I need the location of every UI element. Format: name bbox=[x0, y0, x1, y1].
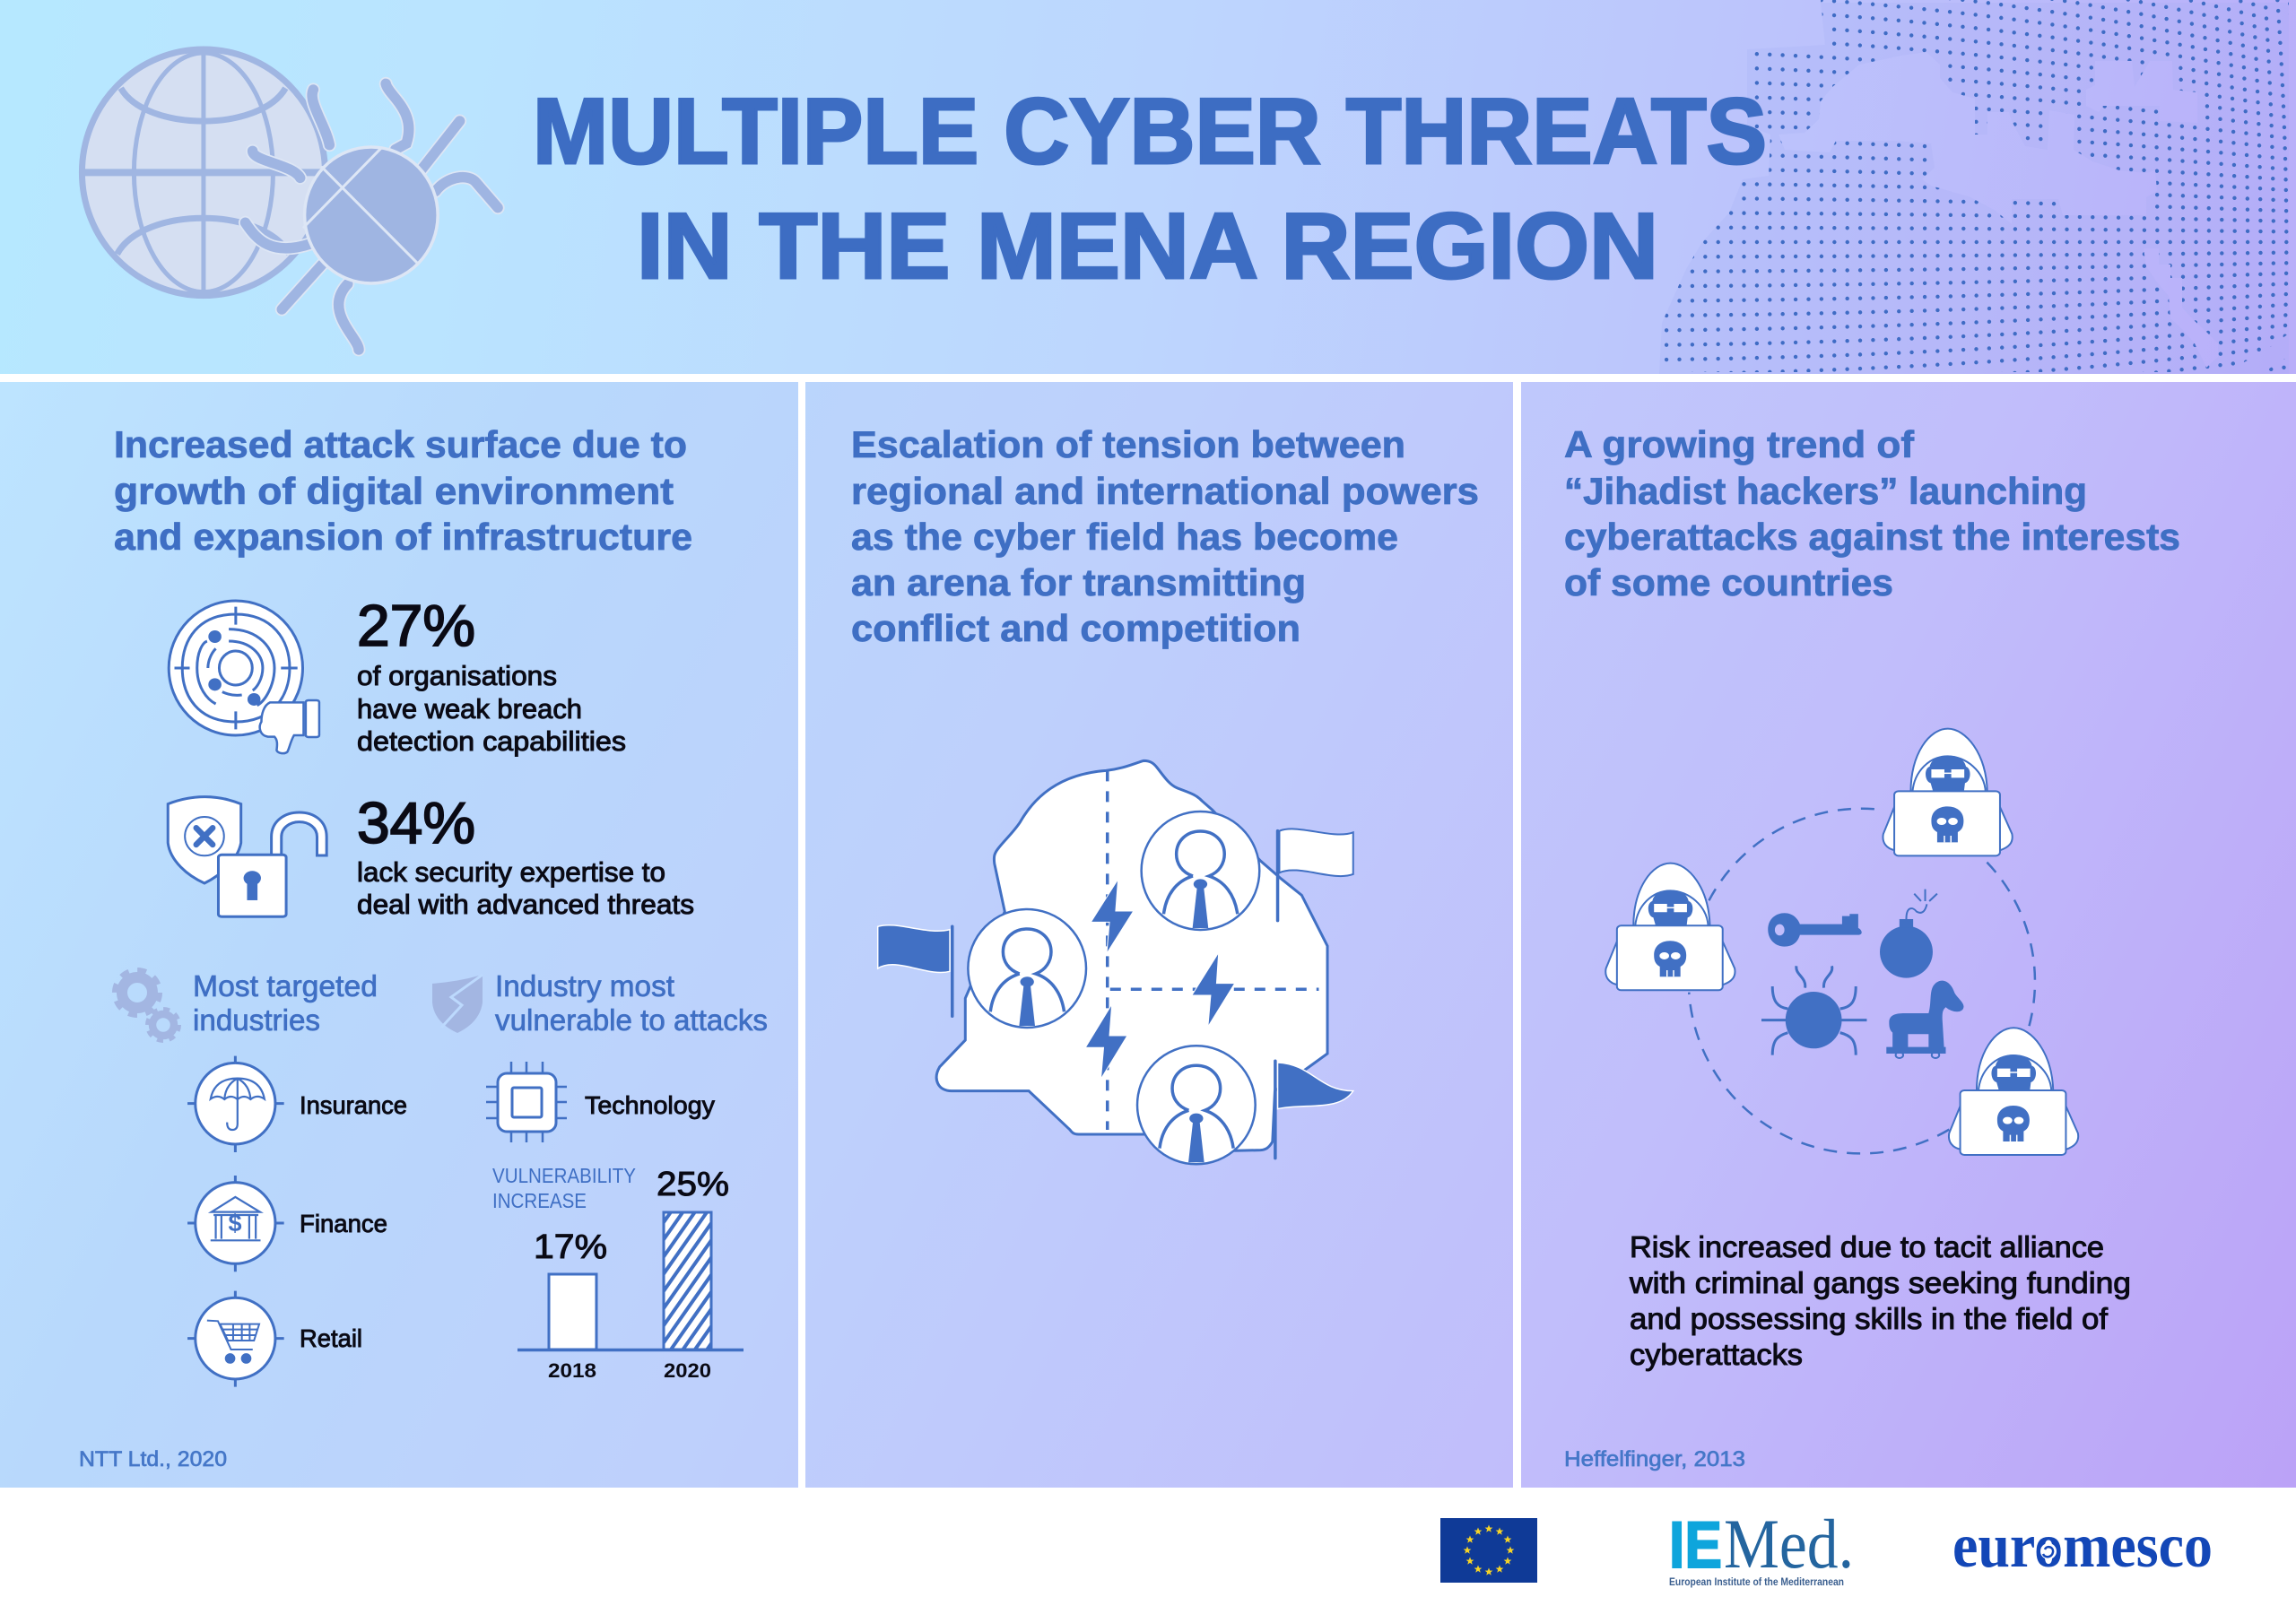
logo: IEMed bbox=[1669, 1505, 1854, 1588]
leader: west bbox=[968, 909, 1086, 1028]
leader: north east bbox=[1142, 812, 1259, 930]
bar chart: vulnerability increase: 2018 bbox=[548, 1359, 596, 1382]
text: alliance risk: cyberattacks bbox=[1630, 1338, 1803, 1371]
icon: globe bbox=[82, 49, 326, 296]
subheading: most targeted industries bbox=[193, 969, 378, 1037]
icon: bug bbox=[1761, 966, 1866, 1055]
heading: right column: “Jihadist hackers” launching bbox=[1564, 470, 2087, 512]
icon: bug bbox=[245, 83, 498, 350]
label: technology: Technology bbox=[585, 1091, 715, 1119]
heading: centre column bbox=[851, 423, 1479, 649]
source: NTT: NTT Ltd., 2020 bbox=[79, 1447, 227, 1471]
bar chart: vulnerability increase: VULNERABILITY bbox=[492, 1164, 636, 1187]
stat: 27 percent: of organisations bbox=[357, 660, 557, 691]
stat: 34 percent: lack security expertise to bbox=[357, 856, 665, 888]
icon: target with thumbs down bbox=[169, 601, 319, 753]
bar chart: vulnerability increase: 25% bbox=[657, 1166, 729, 1203]
flag: west bbox=[878, 925, 952, 1016]
logo: euromesco: euromesco bbox=[1952, 1512, 2213, 1581]
heading: centre column: regional and international powers bbox=[851, 470, 1479, 512]
heading: left column: growth of digital environment bbox=[114, 470, 674, 512]
hacker: bottom bbox=[1949, 1028, 2078, 1155]
logo: IEMed: IE bbox=[1669, 1509, 1722, 1582]
heading: right column: of some countries bbox=[1564, 561, 1893, 603]
stat: 27 percent: 27% bbox=[357, 593, 475, 658]
panel: left column background bbox=[0, 382, 798, 1488]
icon: bomb bbox=[1880, 890, 1937, 978]
heading: left column bbox=[114, 423, 692, 558]
subheading: most targeted industries: Most targeted bbox=[193, 969, 378, 1002]
subheading: industry most vulnerable bbox=[495, 969, 768, 1037]
stat: 34 percent bbox=[357, 790, 694, 920]
label: finance: Finance bbox=[300, 1210, 387, 1237]
logo: IEMed: Med. bbox=[1724, 1505, 1854, 1583]
heading: centre column: an arena for transmitting bbox=[851, 561, 1306, 603]
icon: gears bbox=[115, 970, 179, 1040]
hacker: top bbox=[1883, 729, 2013, 855]
illustration: hackers and cyber threats bbox=[1605, 729, 2078, 1155]
panel: header background bbox=[0, 0, 2296, 374]
stat: 27 percent bbox=[357, 593, 626, 757]
illustration: map with leaders and flags bbox=[878, 760, 1353, 1164]
text: alliance risk: with criminal gangs seeking funding bbox=[1629, 1266, 2131, 1299]
stat: 27 percent: have weak breach bbox=[357, 693, 582, 725]
icon: insurance umbrella bbox=[187, 1056, 284, 1152]
bar chart: vulnerability increase bbox=[492, 1164, 744, 1382]
lightning bolts bbox=[1085, 880, 1235, 1079]
heading: right column: A growing trend of bbox=[1564, 423, 1915, 465]
stat: 34 percent: 34% bbox=[357, 790, 475, 855]
heading: centre column: as the cyber field has become bbox=[851, 516, 1398, 558]
label: insurance: Insurance bbox=[300, 1091, 407, 1119]
heading: centre column: Escalation of tension between bbox=[851, 423, 1405, 465]
icon: cracked shield bbox=[432, 975, 483, 1033]
leader: south east bbox=[1137, 1046, 1256, 1164]
text: alliance risk bbox=[1629, 1230, 2131, 1371]
icon: retail cart bbox=[187, 1291, 284, 1387]
source: Heffelfinger: Heffelfinger, 2013 bbox=[1564, 1447, 1745, 1471]
dashed circle bbox=[1689, 809, 2035, 1153]
bar chart: vulnerability increase: INCREASE bbox=[492, 1189, 587, 1212]
title: MULTIPLE CYBER THREATS bbox=[533, 80, 1767, 184]
map outline bbox=[936, 760, 1327, 1150]
logo: EU flag bbox=[1440, 1518, 1537, 1583]
title: IN THE MENA REGION bbox=[637, 195, 1658, 299]
heading: right column: cyberattacks against the interests bbox=[1564, 516, 2180, 558]
heading: left column: Increased attack surface due to bbox=[114, 423, 687, 465]
subheading: most targeted industries: industries bbox=[193, 1003, 320, 1037]
subheading: industry most vulnerable: vulnerable to attacks bbox=[495, 1003, 768, 1037]
icon: shield and open padlock bbox=[168, 797, 326, 916]
title bbox=[533, 80, 1767, 299]
hacker: left bbox=[1605, 864, 1735, 990]
stat: 27 percent: detection capabilities bbox=[357, 725, 626, 757]
stat: 34 percent: deal with advanced threats bbox=[357, 889, 694, 920]
logo: IEMed: European Institute of the Mediterranean bbox=[1669, 1575, 1844, 1588]
bar chart: vulnerability increase: 17% bbox=[534, 1228, 607, 1266]
icon: finance bank bbox=[187, 1176, 284, 1271]
icon: key bbox=[1768, 913, 1862, 947]
panel: centre column background bbox=[805, 382, 1513, 1488]
flag: north east bbox=[1278, 829, 1353, 921]
flag: south east bbox=[1275, 1061, 1353, 1159]
icon: trojan horse bbox=[1886, 981, 1963, 1058]
icon: finance bank: $ bbox=[228, 1210, 242, 1237]
heading: left column: and expansion of infrastructure bbox=[114, 516, 692, 558]
text: alliance risk: and possessing skills in the field of bbox=[1630, 1302, 2109, 1335]
heading: centre column: conflict and competition bbox=[851, 607, 1300, 649]
icon: technology chip bbox=[486, 1062, 567, 1142]
bar chart: vulnerability increase: 2020 bbox=[664, 1359, 711, 1382]
text: alliance risk: Risk increased due to tacit alliance bbox=[1630, 1230, 2104, 1263]
dashed borders bbox=[1108, 770, 1318, 1130]
panel: right column background bbox=[1521, 382, 2296, 1488]
label: retail: Retail bbox=[300, 1324, 362, 1352]
heading: right column bbox=[1564, 423, 2180, 603]
dotted world map bbox=[1665, 0, 2289, 372]
subheading: industry most vulnerable: Industry most bbox=[495, 969, 674, 1002]
